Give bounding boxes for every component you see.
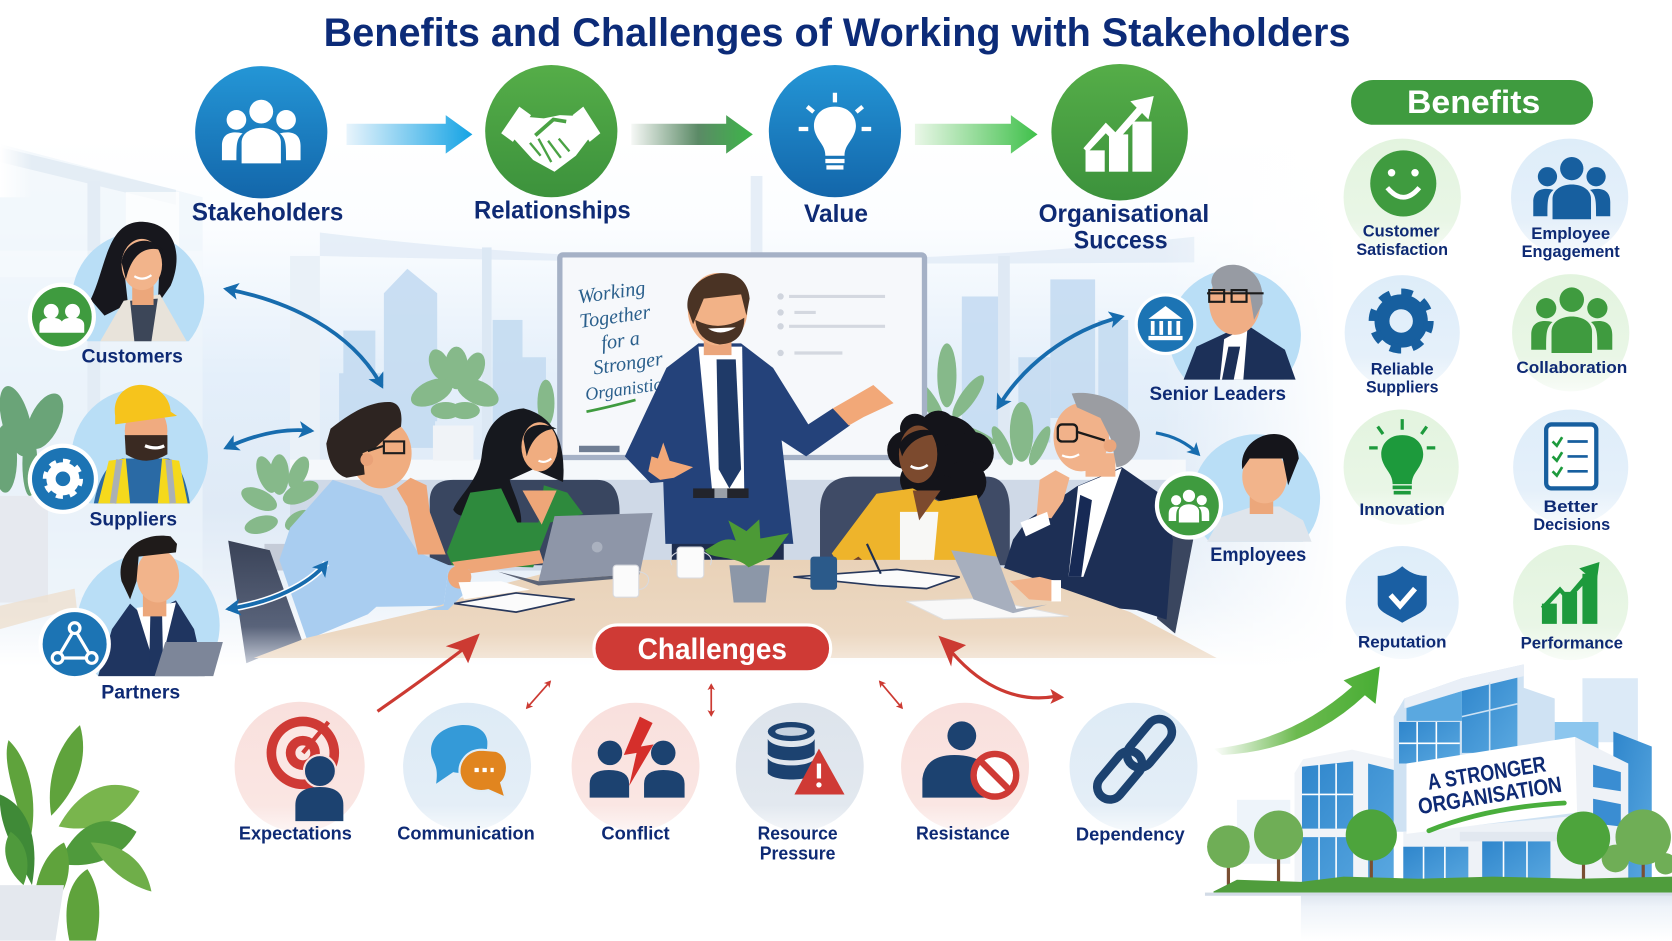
right wing [1575, 737, 1628, 885]
laptop: right [906, 550, 1068, 620]
challenge: Conflict [572, 703, 700, 843]
stakeholder: Employees: Employees [1210, 544, 1306, 566]
benefits heading [1351, 80, 1593, 125]
flow step: Organisational Success: Organisational [1039, 201, 1209, 228]
whiteboard [560, 255, 925, 457]
stakeholder: Partners [38, 536, 223, 703]
notebooks [454, 569, 960, 612]
challenge: Conflict: Conflict [601, 822, 670, 843]
building: a stronger organisation [1205, 664, 1672, 941]
hand on chin [1036, 470, 1070, 518]
benefit: Performance: Performance [1521, 633, 1623, 652]
benefit: Innovation: Innovation [1360, 500, 1445, 519]
arrow: stakeholders to relationships [347, 115, 472, 154]
benefit: Customer Satisfaction: Customer [1363, 222, 1440, 241]
stakeholder: Senior Leaders [1135, 265, 1301, 405]
main tower [1394, 664, 1575, 832]
sign: A STRONGER [1426, 751, 1548, 795]
hair [326, 402, 401, 478]
sign: ORGANISATION [1416, 772, 1563, 819]
left seated man [279, 402, 449, 640]
challenges heading [594, 625, 831, 672]
benefit: Customer Satisfaction [1344, 139, 1461, 259]
far right glass [1613, 732, 1652, 880]
benefit: Reputation: Reputation [1358, 632, 1446, 651]
whiteboard handwriting: for a [600, 327, 641, 355]
benefit: Reliable Suppliers: Suppliers [1366, 377, 1438, 396]
conference table [254, 513, 1217, 658]
challenge: Resource Pressure: Resource [758, 822, 838, 843]
curly hair [887, 411, 994, 503]
hands [843, 557, 947, 573]
green blouse woman [447, 408, 583, 575]
presenter legs [672, 491, 784, 560]
neck [1086, 453, 1115, 477]
pale plants [238, 343, 1054, 537]
arrow: value to organisational success [915, 115, 1038, 154]
potted plant: bottom left [0, 725, 151, 941]
table plant [705, 519, 789, 603]
grey haired man [1001, 393, 1173, 620]
panel: challenges [235, 625, 1197, 864]
blouse [447, 485, 583, 567]
challenge: Resource Pressure: Pressure [760, 843, 835, 864]
presenter jacket [625, 343, 850, 544]
face [1054, 403, 1109, 471]
benefit: Employee Engagement: Engagement [1522, 242, 1620, 261]
challenge: Communication: Communication [397, 822, 535, 843]
challenge: Dependency: Dependency [1076, 823, 1185, 844]
benefit: Reputation [1346, 546, 1459, 659]
benefit: Collaboration: Collaboration [1516, 358, 1627, 377]
benefit: Performance [1513, 545, 1628, 660]
back shelf band [290, 460, 1186, 480]
benefit: Better Decisions [1513, 410, 1628, 534]
whiteboard handwriting [570, 275, 673, 404]
yellow blazer woman [832, 411, 997, 575]
shirt [279, 480, 449, 640]
presenter [625, 273, 894, 560]
hand on laptop [1010, 577, 1061, 601]
benefit: Better Decisions: Better [1544, 497, 1598, 516]
challenge: Communication [397, 703, 535, 843]
glasses [1077, 432, 1105, 440]
arrow: customers link [226, 289, 382, 386]
face [899, 425, 937, 483]
arrow: to a stronger organisation [1213, 667, 1380, 755]
flow step: Relationships: Relationships [474, 198, 631, 225]
blue mug [810, 557, 837, 590]
face [521, 422, 558, 471]
challenge arrows [377, 633, 1064, 716]
benefit: Employee Engagement [1511, 139, 1628, 261]
challenge: Expectations: Expectations [239, 822, 352, 843]
trees [1207, 809, 1672, 892]
challenge: Resistance: Resistance [916, 822, 1010, 843]
laptop: centre left [498, 513, 653, 585]
icon: network badge [38, 608, 111, 680]
sign [1406, 737, 1577, 834]
stakeholder: Employees [1155, 434, 1320, 566]
stakeholder: Customers: Customers [82, 346, 183, 368]
challenge: Resource Pressure [736, 703, 864, 864]
benefit: Better Decisions: Decisions [1533, 515, 1610, 534]
icon: gear badge [28, 444, 98, 514]
stakeholder: Suppliers: Suppliers [90, 509, 177, 531]
challenge: Dependency [1070, 703, 1197, 844]
benefit: Customer Satisfaction: Satisfaction [1356, 240, 1448, 259]
hair [1072, 393, 1140, 467]
ground shading [1301, 896, 1672, 941]
flow step: Value [769, 65, 901, 228]
entrance [1403, 816, 1577, 885]
pen on notebook [867, 544, 881, 574]
blazer [832, 488, 997, 575]
flow step: Organisational Success: Success [1074, 227, 1168, 254]
presenter shirt and tie [698, 347, 744, 493]
arm [452, 550, 544, 575]
title: Benefits and Challenges of Working with Stakeholders [324, 11, 1351, 55]
left wing [1295, 750, 1394, 885]
arrow: partners link [228, 563, 326, 609]
flow step: Stakeholders [192, 66, 343, 227]
flow step: Relationships [474, 65, 631, 225]
benefit: Innovation [1344, 410, 1459, 525]
stakeholder: Partners: Partners [101, 681, 180, 703]
benefit: Collaboration [1512, 274, 1629, 391]
left plant [0, 383, 71, 496]
flow step: Stakeholders: Stakeholders [192, 200, 343, 227]
benefits heading: Benefits [1407, 84, 1540, 120]
challenge: Resistance [901, 703, 1029, 843]
stakeholder: Customers [28, 222, 204, 368]
skyline [339, 269, 1128, 448]
arrow: relationships to value [631, 115, 753, 154]
cuff [1051, 580, 1061, 601]
hedge [1213, 877, 1672, 893]
flow step: Value: Value [804, 201, 868, 228]
background: office scene [0, 133, 1354, 672]
process flow [192, 64, 1209, 254]
icon: institution badge [1135, 293, 1196, 355]
panel: benefits [1344, 80, 1629, 660]
presenter head [704, 325, 732, 355]
icon: customers badge [28, 283, 96, 351]
benefit: Reliable Suppliers: Reliable [1371, 359, 1434, 378]
suit [1001, 467, 1173, 620]
arrow: suppliers link [226, 430, 311, 448]
challenges heading: Challenges [638, 633, 787, 666]
arrow: employees link [1156, 433, 1199, 454]
whiteboard handwriting: Together [578, 301, 652, 333]
chairs behind the table [228, 477, 1193, 663]
whiteboard handwriting: Organistion [584, 372, 673, 404]
flow step: Organisational Success [1039, 64, 1209, 254]
icon: employees badge [1155, 471, 1223, 540]
pale background towers [1582, 678, 1638, 742]
mugs [613, 547, 711, 597]
arm over table [427, 565, 471, 610]
benefit: Reliable Suppliers [1345, 275, 1460, 396]
presenter hands [833, 385, 894, 425]
hair [453, 408, 564, 530]
face [350, 418, 412, 488]
left counter [0, 496, 48, 603]
whiteboard handwriting: Stronger [592, 348, 664, 379]
whiteboard handwriting: Working [576, 277, 647, 308]
arrow: senior leaders link [998, 317, 1122, 407]
challenge: Expectations [235, 702, 365, 843]
stakeholder: Senior Leaders: Senior Leaders [1150, 383, 1286, 405]
benefit: Employee Engagement: Employee [1531, 224, 1610, 243]
stakeholder: Suppliers [28, 385, 208, 531]
arm and chin hand [397, 478, 446, 555]
